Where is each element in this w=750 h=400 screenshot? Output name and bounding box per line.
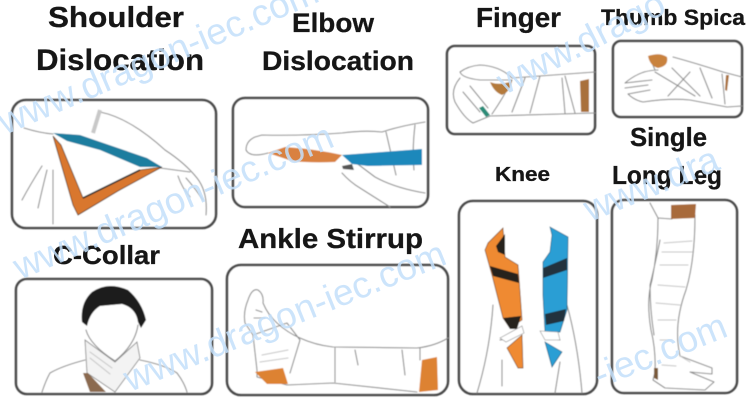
icon: orange splint (53, 136, 162, 215)
icon: hair (82, 286, 146, 328)
panel: ankle stirrup (227, 265, 448, 395)
heading: single: Single (630, 122, 707, 152)
watermarks: www.dragon-iec.com (6, 115, 339, 288)
icon: blue splint (53, 133, 162, 167)
icon: blue upper arm splint (342, 149, 422, 166)
heading: finger: Finger (476, 2, 561, 33)
icon: brown top band (671, 204, 696, 219)
icon: orange shin patch (419, 357, 438, 392)
icon: blue splint (543, 227, 568, 332)
heading: shoulder dislocation second line: Dislocation (36, 44, 204, 77)
heading: elbow: Elbow (292, 8, 375, 38)
heading: shoulder: Shoulder (48, 2, 184, 34)
panel: shoulder dislocation (12, 100, 216, 228)
panel: knee (459, 201, 597, 394)
icon: orange splint straps (490, 234, 521, 329)
heading: c-collar: C-Collar (53, 240, 160, 270)
heading: long leg: Long Leg (612, 160, 722, 190)
watermarks: www.dra (577, 138, 725, 230)
panel: finger (447, 46, 595, 134)
heading: knee: Knee (495, 164, 550, 186)
heading: thumb spica: Thumb Spica (601, 5, 746, 30)
icon: orange finger patch (490, 81, 512, 95)
panel: single long leg (612, 200, 737, 393)
icon: orange forearm splint (268, 147, 342, 162)
watermarks: -iec.com (588, 305, 733, 395)
icon: orange heel patch (255, 368, 288, 384)
heading: elbow dislocation second line: Dislocation (262, 46, 414, 76)
panel: c-collar (16, 279, 212, 394)
panel: thumb spica (613, 41, 742, 117)
icon: orange splint (485, 228, 522, 328)
panel: elbow dislocation (233, 98, 428, 207)
icon: cervical collar (85, 340, 140, 392)
watermarks: www.dragon-iec.com (117, 233, 451, 400)
icon: orange thumb patch (648, 54, 667, 68)
heading: ankle stirrup: Ankle Stirrup (238, 223, 423, 254)
